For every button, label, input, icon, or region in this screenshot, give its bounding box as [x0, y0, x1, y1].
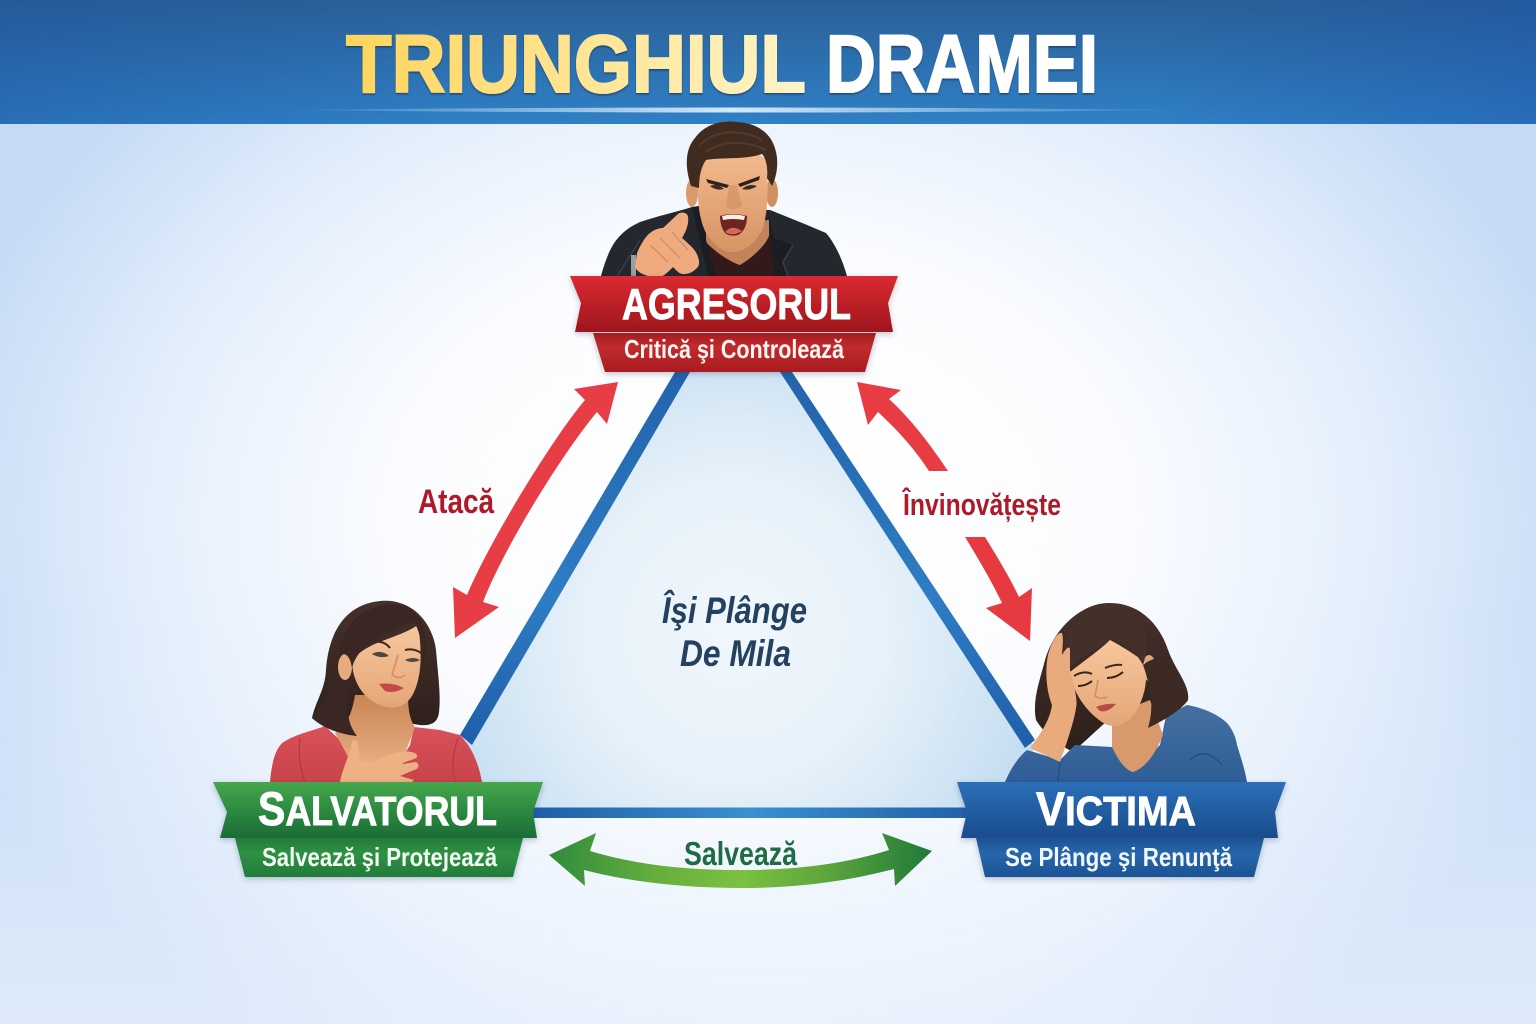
shirt	[270, 726, 482, 782]
neck and chest	[335, 695, 415, 775]
banner: Salvatorul	[213, 782, 543, 877]
brows	[706, 176, 760, 188]
label: Salvează: Salvează	[684, 835, 798, 872]
banner: Victima	[957, 782, 1286, 877]
neck	[1112, 700, 1163, 772]
jacket	[601, 207, 847, 276]
figure: Salvatorul woman	[270, 601, 482, 782]
title: DRAMEI	[826, 19, 1098, 110]
arrow: Salvează double arrow	[549, 833, 932, 888]
pointing hand	[635, 213, 699, 277]
hair back	[1035, 603, 1188, 752]
subtitle: Salvează şi Protejează	[262, 842, 497, 872]
banner: Agresorul	[570, 276, 898, 372]
ears	[686, 179, 698, 207]
arrow: Învinovățește upper	[857, 382, 948, 471]
shirt	[1005, 705, 1247, 782]
hand on chest	[340, 740, 418, 782]
brows and eyes	[372, 642, 421, 653]
nose	[392, 655, 405, 678]
neck	[706, 220, 769, 265]
label: Învinovățește: Învinovățește	[901, 486, 1061, 522]
mouth	[720, 214, 747, 236]
hair front right	[1143, 650, 1188, 728]
cuff	[631, 255, 636, 276]
eyes	[710, 185, 757, 190]
banner main	[213, 782, 543, 838]
banner main	[570, 276, 898, 332]
banner main	[957, 782, 1286, 838]
hair back	[312, 601, 440, 736]
hair	[687, 122, 777, 188]
heading: AGRESORUL	[622, 280, 851, 329]
ear	[338, 654, 352, 680]
lips	[1096, 704, 1116, 711]
lips	[379, 684, 404, 692]
label: Atacă: Atacă	[418, 483, 495, 521]
fringe	[1063, 610, 1146, 672]
triangle centre text	[662, 589, 807, 674]
ear	[1142, 655, 1156, 681]
jacket lapels	[692, 205, 793, 276]
heading: VICTIMA	[1036, 782, 1196, 835]
subtitle: Critică şi Controlează	[624, 334, 844, 364]
central triangle	[460, 372, 1035, 818]
hand and arm	[1030, 633, 1077, 762]
title: TRIUNGHIUL	[346, 19, 806, 110]
triangle centre text: De Mila	[680, 633, 791, 674]
banner lower	[235, 838, 523, 877]
banner lower	[976, 838, 1264, 877]
face	[1070, 640, 1146, 726]
title	[346, 19, 1098, 110]
fringe and lock	[312, 604, 426, 736]
brows and closed eyes	[1074, 665, 1122, 676]
face	[698, 154, 768, 252]
figure: Victima woman	[1005, 603, 1247, 782]
arrow: Atacă double arrow	[453, 382, 618, 638]
figure: Agresorul man	[601, 122, 847, 277]
header band	[0, 0, 1536, 124]
nose	[726, 185, 742, 209]
shirt	[704, 236, 774, 276]
nose	[1095, 680, 1107, 698]
face	[352, 625, 421, 707]
arrow: Învinovățește lower	[965, 537, 1032, 641]
triangle centre text: Îşi Plânge	[662, 589, 807, 631]
subtitle: Se Plânge şi Renunţă	[1005, 842, 1232, 872]
heading: SALVATORUL	[258, 782, 497, 835]
banner lower	[593, 333, 876, 372]
